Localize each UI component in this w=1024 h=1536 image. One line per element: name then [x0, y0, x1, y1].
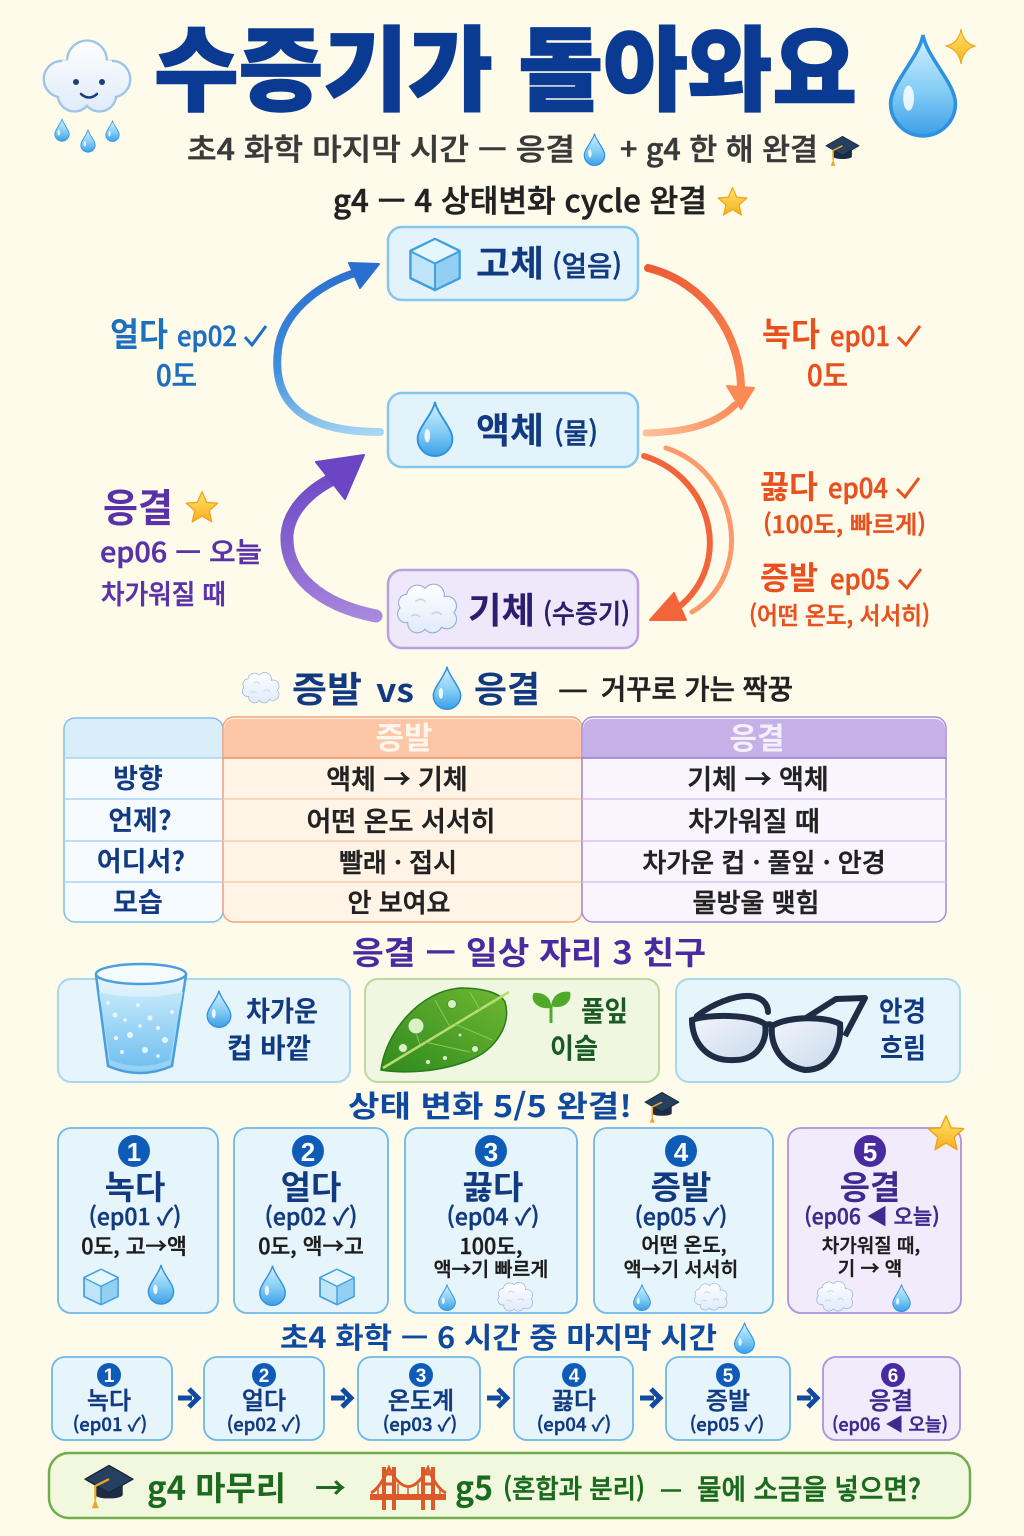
lesson 6: 6: [888, 1366, 898, 1387]
label: evaporation: [749, 553, 930, 631]
label: melting: ep01: [830, 315, 890, 354]
arrow: [331, 1389, 351, 1407]
card: condense: 5: [863, 1137, 877, 1167]
lesson 4: 끓다: [552, 1381, 596, 1416]
lesson 2: (ep02 ✓): [227, 1411, 301, 1437]
lesson 6: (ep06 ◀ 오늘): [832, 1411, 948, 1437]
table column: labels: [64, 718, 223, 922]
arrow: [797, 1389, 817, 1407]
box: gas: 기체: [468, 582, 535, 634]
arrow: [178, 1389, 198, 1407]
card: cold cup: 차가운: [246, 990, 318, 1030]
label: condensation: ep06 — 오늘: [100, 531, 262, 570]
lesson 2: [204, 1357, 324, 1440]
comparison heading: vs: [376, 666, 414, 712]
subtitle: + g4 한 해 완결: [620, 125, 818, 169]
lesson 4: [514, 1357, 633, 1440]
label: boiling: 끓다: [760, 462, 818, 508]
card: boil: 끓다: [463, 1161, 523, 1209]
footer banner: g4 마무리: [147, 1462, 286, 1510]
table column: evaporation: [223, 713, 582, 922]
label: melting: 녹다: [762, 308, 820, 356]
lesson 5: 5: [723, 1366, 734, 1387]
footer banner: g5: [455, 1462, 493, 1510]
lesson 3: 3: [416, 1366, 426, 1387]
lesson 2: 얼다: [242, 1381, 286, 1416]
card: condense: (ep06 ◀ 오늘): [804, 1201, 940, 1231]
arrow: melting: [646, 268, 754, 433]
card: glasses: [676, 979, 960, 1082]
lesson 1: [52, 1357, 172, 1440]
comparison heading: 거꾸로 가는 짝꿍: [601, 668, 793, 708]
lessons heading: 초4 화학 — 6 시간 중 마지막 시간: [280, 1315, 717, 1357]
table column: labels: 언제?: [108, 799, 172, 838]
card: evaporate: 어떤 온도,: [641, 1229, 727, 1258]
states heading: 상태 변화 5/5 완결!: [348, 1082, 632, 1126]
card: cold cup: [58, 964, 350, 1082]
icon: leaf with dew: [381, 988, 509, 1072]
footer banner: [49, 1453, 970, 1518]
lesson 4: 4: [569, 1366, 580, 1387]
card: freeze: [234, 1128, 388, 1313]
table column: condensation: 응결: [729, 714, 785, 758]
label: melting: [762, 308, 920, 395]
card: freeze: 0도, 액→고: [258, 1230, 364, 1261]
card: glasses: 안경: [879, 990, 926, 1030]
card: evaporate: 증발: [651, 1161, 711, 1209]
card: melt: 1: [127, 1137, 141, 1167]
table column: labels: 어디서?: [97, 840, 185, 879]
card: evaporate: [594, 1128, 773, 1313]
box: solid: 고체: [476, 235, 544, 287]
card: cold cup: 컵 바깥: [227, 1027, 311, 1067]
label: condensation: [100, 478, 262, 612]
table column: evaporation: 액체 → 기체: [326, 758, 468, 797]
label: freezing: 0도: [156, 353, 197, 395]
table column: evaporation: 증발: [375, 713, 433, 758]
footer banner: (혼합과 분리): [503, 1469, 645, 1506]
lesson 5: 증발: [706, 1381, 750, 1416]
lesson 5: (ep05 ✓): [690, 1411, 764, 1437]
card: melt: [58, 1128, 218, 1313]
lesson 3: [358, 1357, 480, 1440]
icon: sprout: [533, 992, 571, 1023]
table column: labels: 방향: [113, 757, 163, 796]
comparison table: [64, 713, 946, 922]
card: leaf: 풀잎: [581, 990, 628, 1030]
label: evaporation: (어떤 온도, 서서히): [749, 596, 930, 631]
icon: bridge: [370, 1467, 446, 1510]
icon: graduation cap: [85, 1465, 133, 1508]
subtitle: 초4 화학 마지막 시간 — 응결: [187, 125, 575, 169]
state cycle diagram: [100, 227, 930, 648]
card: freeze: (ep02 ✓): [265, 1198, 357, 1232]
card: boil: (ep04 ✓): [447, 1198, 539, 1232]
subtitle: [187, 125, 859, 169]
label: condensation: 차가워질 때: [101, 573, 226, 612]
card: melt: 0도, 고→액: [81, 1230, 187, 1261]
box: gas: (수증기): [543, 594, 630, 631]
table column: labels: 모습: [113, 881, 163, 920]
card: leaf: [365, 979, 659, 1082]
card: melt: 녹다: [105, 1161, 165, 1209]
title: 수증기가 돌아와요: [154, 0, 857, 130]
label: evaporation: 증발: [760, 553, 818, 599]
footer banner: 물에 소금을 넣으면?: [697, 1468, 921, 1508]
card: boil: [405, 1128, 577, 1313]
card: condense: 기 → 액: [838, 1254, 902, 1281]
arrow: [640, 1389, 660, 1407]
card: boil: 액→기 빠르게: [434, 1253, 548, 1282]
table column: condensation: 기체 → 액체: [687, 758, 829, 797]
icon: large water drop with sparkle: [891, 29, 975, 136]
card: melt: (ep01 ✓): [89, 1198, 181, 1232]
card: leaf: 이슬: [550, 1027, 598, 1067]
card: condense: 응결: [840, 1161, 900, 1209]
arrow: condensation: [287, 455, 376, 616]
card: glasses: 흐림: [880, 1027, 926, 1067]
box: liquid: 액체: [476, 402, 544, 454]
table column: evaporation: 안 보여요: [348, 883, 450, 920]
lesson 2: 2: [259, 1366, 269, 1387]
table column: condensation: [582, 714, 946, 922]
icon: foggy glasses: [692, 996, 865, 1070]
lesson 6: [823, 1357, 960, 1440]
label: evaporation: ep05: [830, 558, 890, 597]
label: boiling: ep04: [828, 467, 888, 506]
table column: evaporation: 어떤 온도 서서히: [306, 800, 496, 839]
box: liquid: (물): [554, 412, 598, 452]
arrow: boiling and evaporation: [644, 448, 732, 620]
label: melting: 0도: [807, 353, 848, 395]
label: freezing: [110, 308, 266, 395]
lesson 1: 녹다: [87, 1381, 131, 1416]
label: boiling: [760, 462, 926, 540]
icon: smiling rain cloud: [45, 42, 129, 152]
card: boil: 100도,: [460, 1230, 522, 1261]
table column: condensation: 차가워질 때: [688, 800, 820, 839]
icon: cold glass: [96, 964, 186, 1073]
comparison heading: —: [558, 666, 588, 708]
box: liquid: [388, 393, 638, 467]
lesson 6: 응결: [869, 1381, 913, 1416]
card: condense: [788, 1116, 964, 1313]
label: condensation: 응결: [103, 478, 173, 534]
daily life heading: 응결 — 일상 자리 3 친구: [352, 928, 706, 974]
card: evaporate: (ep05 ✓): [635, 1198, 727, 1232]
lesson 4: (ep04 ✓): [537, 1411, 611, 1437]
card: freeze: 얼다: [281, 1161, 341, 1209]
card: boil: 3: [484, 1137, 498, 1167]
card: evaporate: 4: [674, 1137, 689, 1167]
table column: condensation: 차가운 컵 · 풀잎 · 안경: [642, 843, 886, 880]
lesson 1: (ep01 ✓): [73, 1411, 147, 1437]
label: freezing: 얼다: [110, 308, 168, 356]
label: freezing: ep02: [177, 315, 237, 354]
table column: condensation: 물방울 맺힘: [693, 883, 819, 920]
box: gas: [388, 570, 638, 648]
box: solid: [388, 227, 638, 300]
footer banner: →: [315, 1464, 346, 1508]
arrow: [487, 1389, 507, 1407]
comparison heading: 응결: [474, 661, 540, 713]
card: condense: 차가워질 때,: [822, 1231, 920, 1258]
lesson 1: 1: [104, 1366, 115, 1387]
table column: evaporation: 빨래 · 접시: [339, 843, 457, 880]
lesson 3: 온도계: [388, 1381, 454, 1416]
cycle heading: g4 — 4 상태변화 cycle 완결: [333, 176, 707, 221]
arrow: freezing: [277, 263, 380, 432]
comparison heading: [243, 661, 793, 713]
lesson 3: (ep03 ✓): [383, 1411, 457, 1437]
lesson 5: [666, 1357, 790, 1440]
label: boiling: (100도, 빠르게): [763, 505, 926, 540]
card: freeze: 2: [301, 1137, 315, 1167]
footer banner: —: [660, 1469, 682, 1506]
comparison heading: 증발: [292, 661, 362, 713]
box: solid: (얼음): [552, 245, 622, 285]
card: evaporate: 액→기 서서히: [624, 1253, 738, 1282]
